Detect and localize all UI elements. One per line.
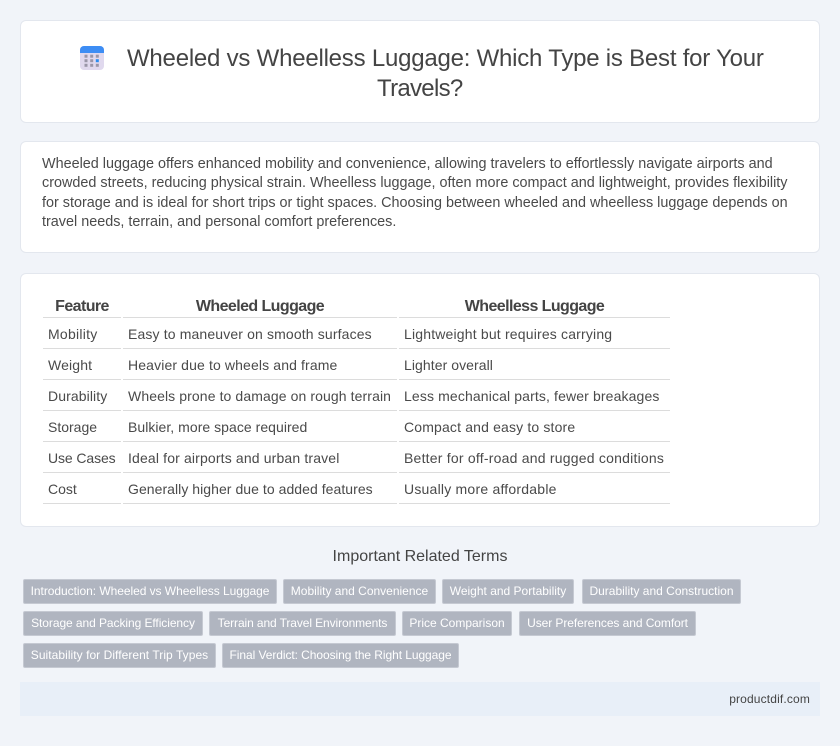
table rows: Wheels prone to damage on rough terrain bbox=[128, 388, 391, 404]
related term tags: User Preferences and Comfort bbox=[527, 616, 688, 630]
table rows: Cost bbox=[48, 481, 77, 497]
heading: related terms: Important Related Terms bbox=[333, 548, 507, 565]
table header bbox=[55, 298, 604, 315]
table rows: Lighter overall bbox=[404, 357, 493, 373]
title: Wheeled vs Wheelless Luggage: Which Type is Best for Your bbox=[127, 45, 764, 72]
table header: Wheelless Luggage bbox=[465, 298, 604, 315]
footer bar bbox=[20, 682, 820, 716]
table rows: Mobility bbox=[48, 326, 97, 342]
table rows: Storage bbox=[48, 419, 97, 435]
title: Travels? bbox=[377, 75, 463, 102]
table rows: Ideal for airports and urban travel bbox=[128, 450, 339, 466]
related term tags: Price Comparison bbox=[409, 616, 505, 630]
panel: title card bbox=[20, 20, 820, 123]
table rows: Use Cases bbox=[48, 450, 116, 466]
related term tags: Suitability for Different Trip Types bbox=[31, 648, 208, 662]
table rows bbox=[48, 326, 664, 497]
intro paragraph: Wheeled luggage offers enhanced mobility and convenience, allowing travelers to effortlessly navigate airports and bbox=[42, 156, 773, 172]
intro paragraph bbox=[42, 156, 788, 230]
related term tags: Weight and Portability bbox=[450, 584, 566, 598]
title bbox=[127, 45, 764, 102]
table rows: Generally higher due to added features bbox=[128, 481, 373, 497]
table rows: Bulkier, more space required bbox=[128, 419, 307, 435]
panel: comparison table bbox=[20, 273, 820, 527]
table rows: Lightweight but requires carrying bbox=[404, 326, 612, 342]
table header: Feature bbox=[55, 298, 109, 315]
table rows: Better for off-road and rugged conditions bbox=[404, 450, 664, 466]
table rows: Heavier due to wheels and frame bbox=[128, 357, 337, 373]
related term tags: Mobility and Convenience bbox=[291, 584, 428, 598]
icon: calendar bbox=[80, 46, 104, 70]
related term tags bbox=[23, 579, 741, 668]
related term tags: Final Verdict: Choosing the Right Luggage bbox=[230, 648, 451, 662]
table rows: Usually more affordable bbox=[404, 481, 557, 497]
footer source text: productdif.com bbox=[729, 692, 810, 706]
panel: intro text bbox=[20, 141, 820, 253]
table header: Wheeled Luggage bbox=[196, 298, 324, 315]
intro paragraph: travel needs, terrain, and personal comfort preferences. bbox=[42, 214, 396, 230]
related term tags: Storage and Packing Efficiency bbox=[31, 616, 195, 630]
intro paragraph: for storage and is ideal for short trips or tight spaces. Choosing between wheeled and wheelless luggage depends on bbox=[42, 195, 788, 211]
table rows: Less mechanical parts, fewer breakages bbox=[404, 388, 660, 404]
table rows: Compact and easy to store bbox=[404, 419, 575, 435]
table rows: Easy to maneuver on smooth surfaces bbox=[128, 326, 372, 342]
related term tags: Durability and Construction bbox=[589, 584, 734, 598]
related term tags: Terrain and Travel Environments bbox=[218, 616, 387, 630]
table rows: Durability bbox=[48, 388, 107, 404]
intro paragraph: crowded streets, reducing physical strain. Wheelless luggage, often more compact and lightweight, provides flexibility bbox=[42, 175, 788, 191]
table rows: Weight bbox=[48, 357, 92, 373]
related term tags: Introduction: Wheeled vs Wheelless Luggage bbox=[31, 584, 269, 598]
